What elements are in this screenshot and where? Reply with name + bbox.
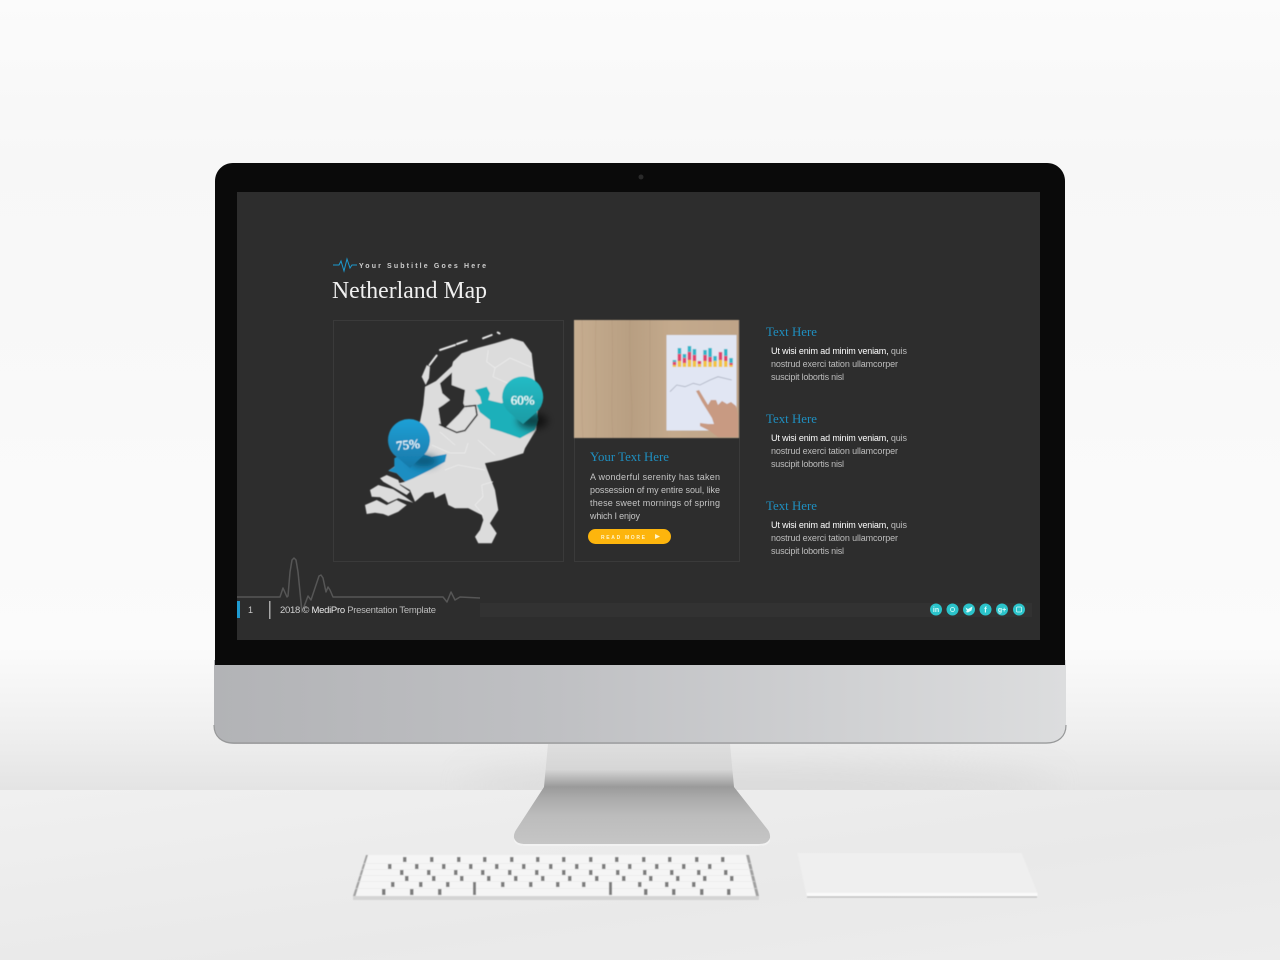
monitor chin — [214, 660, 1066, 744]
monitor stand — [514, 744, 770, 846]
province borders — [432, 350, 533, 515]
mainland — [388, 338, 538, 543]
Flevoland — [445, 405, 477, 432]
read more button: READ MORE — [601, 535, 646, 541]
text block 3: suscipit lobortis nisl — [771, 546, 844, 556]
text block 2: Text Here — [766, 412, 817, 426]
map of the Netherlands — [365, 332, 548, 543]
panel: photo card — [574, 320, 740, 562]
pin: 60%: 60% — [511, 392, 535, 408]
heartbeat line — [237, 558, 480, 612]
card body text: which I enjoy — [589, 511, 640, 521]
trackpad — [798, 853, 1038, 897]
text block 1: suscipit lobortis nisl — [771, 372, 844, 382]
footer text — [237, 601, 436, 619]
text block 2: nostrud exerci tation ullamcorper — [771, 446, 898, 456]
icon: instagram — [1013, 604, 1025, 616]
text block 3 — [766, 499, 908, 556]
text block 2: suscipit lobortis nisl — [771, 459, 844, 469]
read more button — [588, 529, 671, 544]
hand — [696, 390, 738, 437]
card body text: these sweet mornings of spring — [590, 498, 720, 508]
social icons — [930, 604, 1025, 616]
screen — [237, 192, 1040, 640]
card body text: A wonderful serenity has taken — [590, 472, 720, 482]
pin: 60% — [502, 377, 543, 424]
monitor body — [214, 163, 1066, 744]
text block 3: Ut wisi enim ad minim veniam, quis — [771, 520, 908, 530]
text block 1: Ut wisi enim ad minim veniam, quis — [771, 346, 908, 356]
icon: linkedin: in — [933, 607, 939, 614]
text block 3: Text Here — [766, 499, 817, 513]
camera — [638, 174, 644, 180]
icon: twitter — [963, 604, 975, 616]
IJsselmeer — [438, 372, 465, 428]
card body text — [589, 472, 720, 521]
line chart on paper — [670, 377, 732, 392]
monitor bezel — [215, 163, 1065, 665]
text block 1 — [766, 325, 908, 382]
panel: map — [334, 320, 564, 562]
region: South Holland highlighted — [388, 450, 447, 482]
card body text: possession of my entire soul, like — [590, 485, 720, 495]
pin: 75%: 75% — [395, 436, 421, 453]
Wadden islands — [422, 365, 430, 385]
text block 1: Text Here — [766, 325, 817, 339]
text block 2: Ut wisi enim ad minim veniam, quis — [771, 433, 908, 443]
region: Overijssel highlighted — [475, 387, 538, 438]
subtitle with pulse icon — [333, 259, 486, 271]
Zeeland islands — [380, 475, 410, 495]
footer text: 1 — [248, 605, 253, 615]
icon: facebook: f — [984, 606, 987, 614]
title: Netherland Map — [332, 278, 487, 304]
card heading: Your Text Here — [590, 450, 669, 464]
pin: 75% — [388, 419, 430, 468]
text block 2 — [766, 412, 908, 469]
text block 3: nostrud exerci tation ullamcorper — [771, 533, 898, 543]
footer bar — [480, 603, 1032, 617]
icon: google plus: g+ — [998, 607, 1006, 614]
keyboard — [353, 855, 759, 900]
footer text: 2018 © MediPro Presentation Template — [280, 605, 436, 616]
pin shadows — [518, 413, 548, 429]
icon: dribbble — [946, 604, 958, 616]
photo: hand pointing at chart on wood — [574, 320, 739, 438]
text block 1: nostrud exerci tation ullamcorper — [771, 359, 898, 369]
bar chart on paper — [673, 346, 733, 367]
subtitle with pulse icon: Your Subtitle Goes Here — [359, 263, 486, 270]
